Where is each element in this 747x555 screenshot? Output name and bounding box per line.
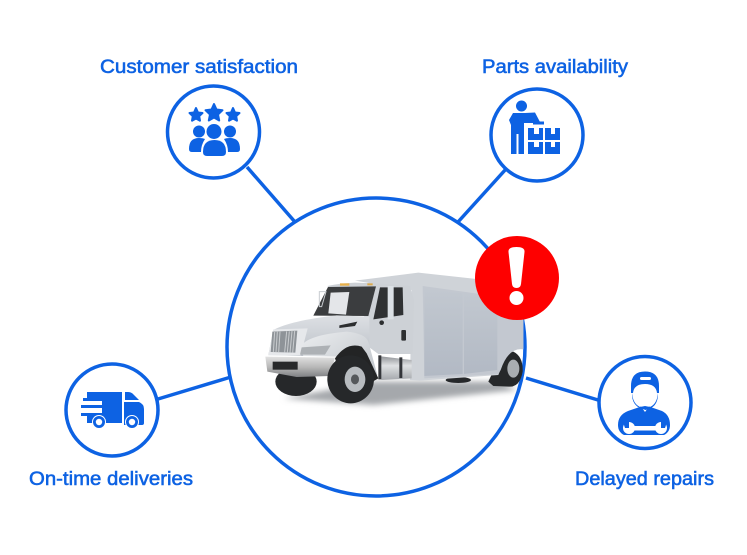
bumper (265, 357, 335, 377)
heading: On-time deliveries (29, 469, 193, 490)
icon circle (599, 356, 691, 448)
heading: Customer satisfaction (100, 57, 298, 78)
left front wheel (275, 367, 317, 396)
heading: Delayed repairs (575, 469, 714, 490)
connector lines (158, 167, 598, 400)
icon: mechanic (618, 372, 670, 435)
icon: delivery van (81, 392, 144, 429)
icon circle (491, 89, 583, 181)
icon circle (66, 364, 158, 456)
alert badge (475, 236, 559, 320)
node: delayed repairs (575, 356, 714, 490)
node: customer satisfaction (100, 57, 298, 178)
icon circle (168, 86, 260, 178)
right front wheel (327, 355, 374, 403)
node: parts availability (482, 57, 629, 181)
central circle (227, 198, 525, 496)
truck illustration (265, 273, 523, 405)
node: on-time deliveries (29, 364, 193, 490)
rear wheel (488, 352, 523, 387)
icon: worker with boxes (509, 100, 560, 154)
icon: people and stars (189, 104, 240, 156)
heading: Parts availability (482, 57, 629, 78)
